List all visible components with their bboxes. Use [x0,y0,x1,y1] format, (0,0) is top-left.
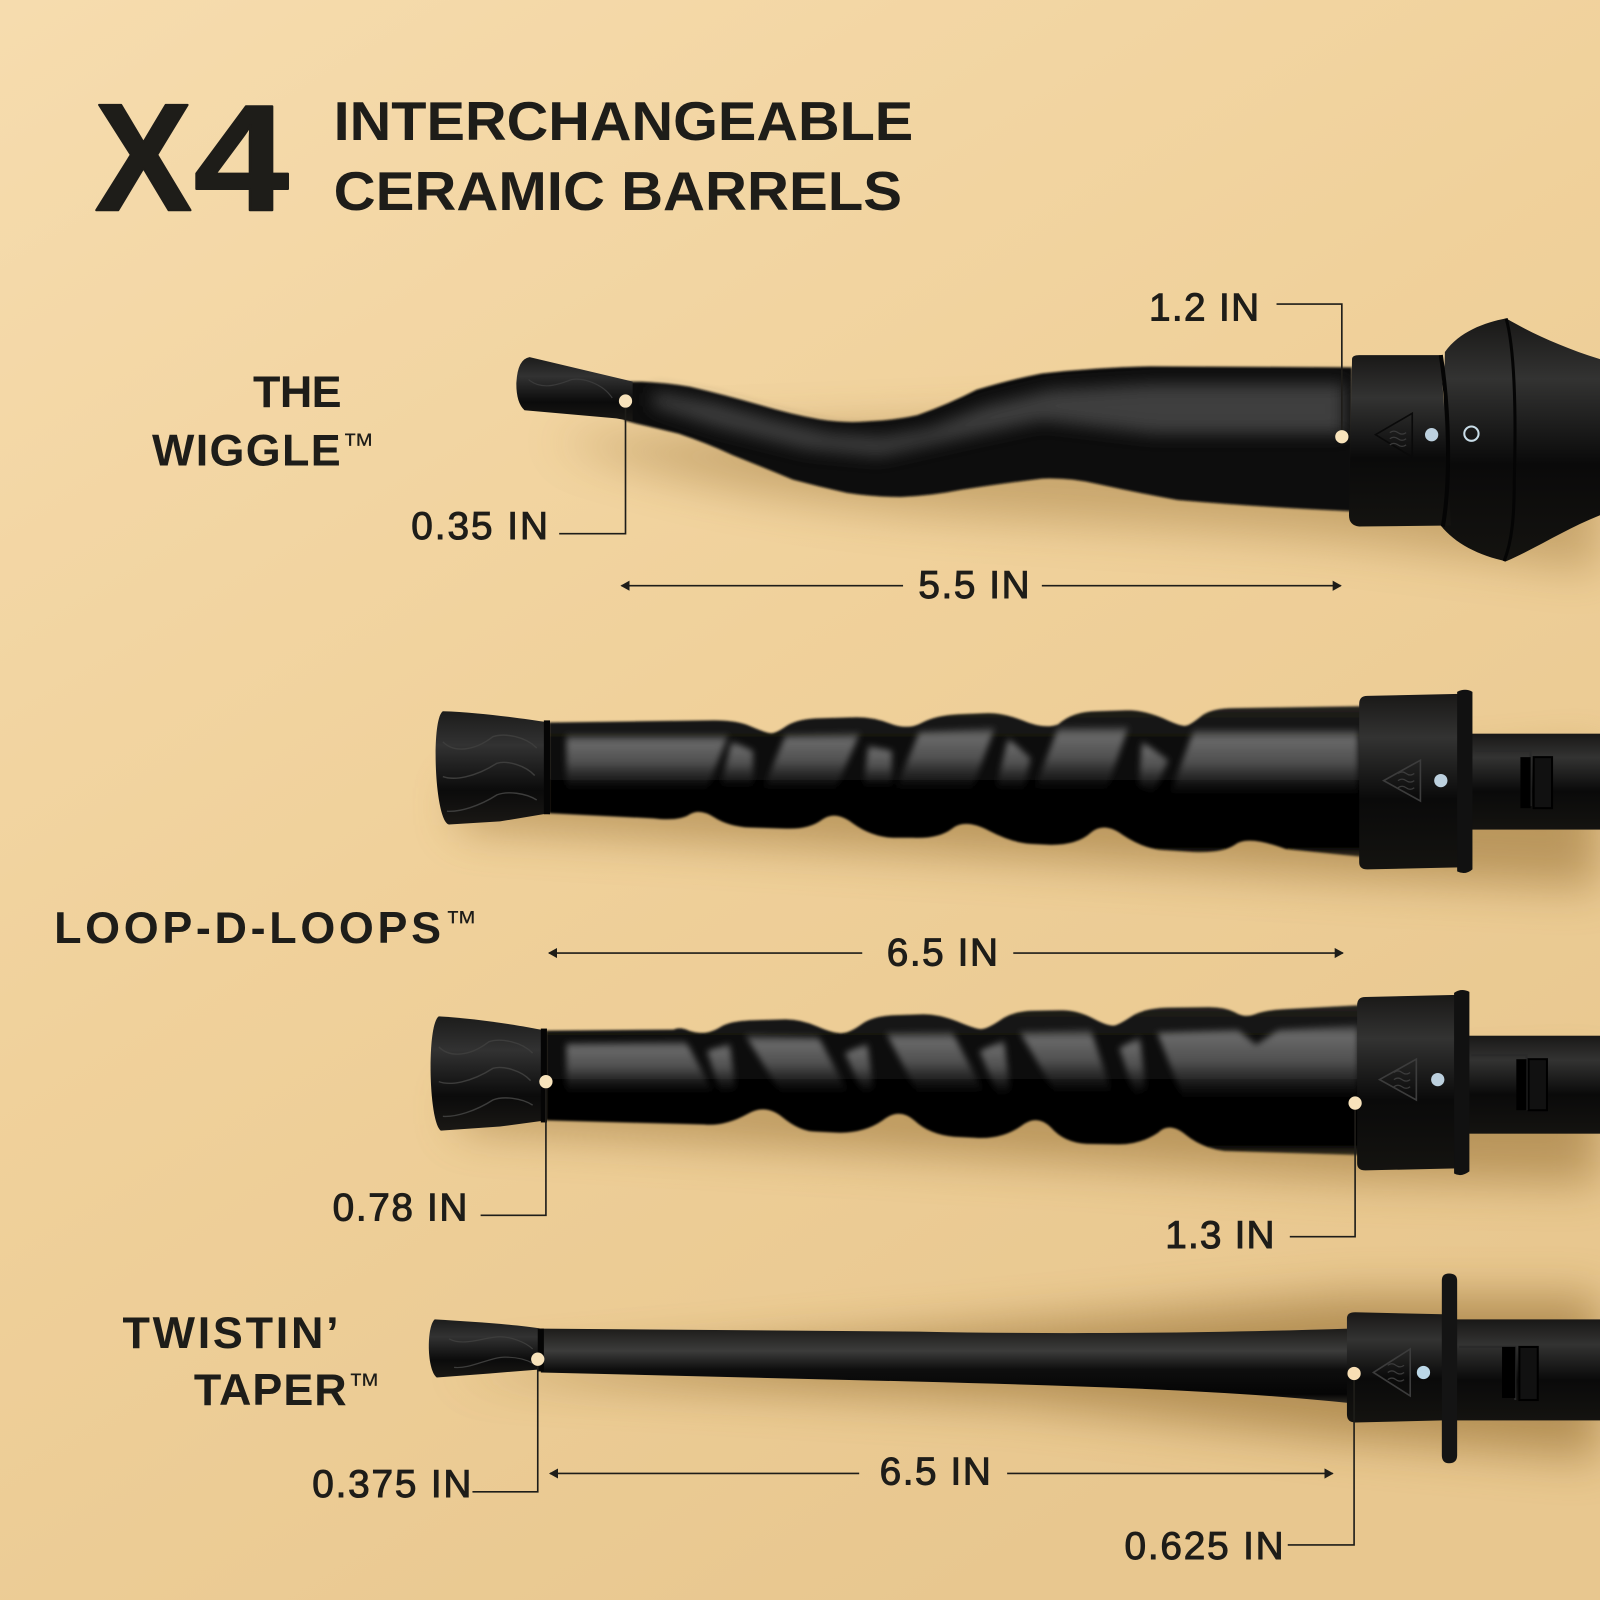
measure: 0.375 in: 0.375 IN [312,1463,471,1506]
cast shadows [449,408,1600,1459]
measure: 0.625 in: 0.625 IN [1124,1525,1284,1568]
arrow: 6.5 in taper: 6.5 IN [880,1451,991,1494]
icon: blue dot [1425,428,1438,441]
arrow: 6.5 in loop: 6.5 IN [887,931,998,974]
barrel: the wiggle [516,318,1600,561]
measure: 0.78 in [333,1075,553,1229]
measure: 1.3 in: 1.3 IN [1165,1214,1274,1257]
title: X4: 4 [194,74,289,243]
icon: blue dot [1417,1366,1430,1379]
heading: interchangeable ceramic barrels: CERAMIC BARRELS [334,160,902,222]
measure: 0.375 in [312,1353,544,1506]
title: X4: X [95,72,192,243]
label: twistin' taper: ™ [348,1366,380,1403]
label: the wiggle [152,366,375,475]
measure: 0.35 in [411,394,632,548]
icon: blue dot [1434,774,1447,787]
measure: 1.3 in [1165,1096,1362,1257]
barrel: twistin' taper [429,1273,1600,1463]
label: the wiggle: ™ [342,426,375,463]
measure: 0.35 in: 0.35 IN [411,505,548,548]
label: twistin' taper: TWISTIN’ [122,1307,341,1358]
heading: interchangeable ceramic barrels [334,90,913,222]
measure: 1.2 in: 1.2 IN [1149,286,1259,329]
barrel: loop-d-loops top [436,690,1600,873]
icon: blue dot [1431,1073,1444,1086]
icon: ring [1464,427,1479,441]
arrow: 5.5 in: 5.5 IN [918,564,1030,607]
icon: heat triangle [1376,413,1412,457]
label: the wiggle: WIGGLE [152,424,342,475]
heading: interchangeable ceramic barrels: INTERCHANGEABLE [334,90,913,152]
label: the wiggle: THE [253,366,341,417]
label: loop-d-loops: ™ [445,904,477,941]
measure: 0.78 in: 0.78 IN [333,1186,467,1229]
label: loop-d-loops: LOOP-D-LOOPS [54,902,445,953]
title: X4 [95,72,289,243]
label: twistin' taper: TAPER [194,1364,348,1415]
label: twistin' taper [122,1307,380,1415]
barrel: loop-d-loops bottom [431,990,1600,1175]
measure: 1.2 in [1149,286,1348,443]
measure: 0.625 in [1124,1367,1361,1568]
